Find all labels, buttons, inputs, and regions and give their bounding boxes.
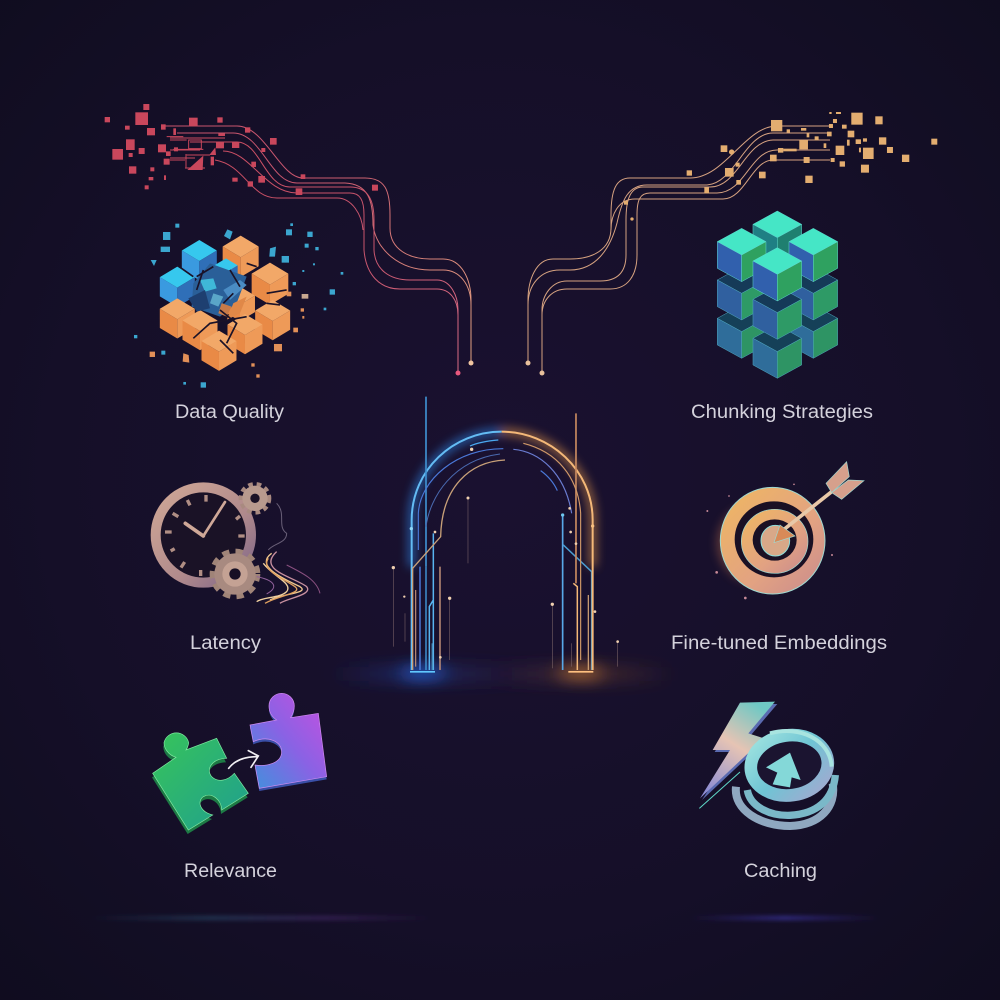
icon: clock with gears	[156, 485, 320, 603]
purple puzzle piece	[250, 693, 327, 791]
middle layer	[717, 267, 838, 339]
green puzzle piece	[152, 733, 248, 834]
lightning bolt	[699, 702, 777, 808]
orange and blue cubes	[160, 236, 290, 371]
left wires	[163, 126, 471, 373]
portal floor glows	[400, 669, 603, 677]
node dots	[392, 448, 619, 659]
floating nodes with stems	[393, 498, 618, 668]
target rings	[720, 487, 825, 594]
stacked coins	[736, 730, 835, 826]
clock ring	[156, 487, 251, 583]
connecting arrow	[229, 751, 258, 768]
right wire end dots	[526, 360, 544, 376]
gold particles	[624, 112, 937, 221]
label: Latency: Latency	[190, 633, 262, 654]
portal floor band	[330, 667, 673, 681]
coin arrow	[766, 753, 801, 787]
left wire end dots	[456, 360, 474, 376]
label: Fine-tuned Embeddings: Fine-tuned Embeddings	[671, 633, 887, 654]
orange arcs	[413, 413, 593, 670]
small gear	[242, 485, 268, 512]
bottom layer	[717, 305, 838, 378]
bottom glow line	[90, 916, 880, 920]
clock ticks	[165, 495, 245, 576]
arch glow	[412, 432, 593, 567]
right data stream: gold particles and wires	[526, 112, 937, 376]
icon: target with arrow	[706, 462, 864, 599]
base glow cores	[410, 671, 593, 673]
label: Relevance: Relevance	[184, 861, 277, 882]
left data stream: red particles and wires	[105, 104, 474, 376]
red particles	[105, 104, 378, 195]
sparks	[706, 483, 833, 599]
label: Chunking Strategies: Chunking Strategies	[691, 402, 873, 423]
icon: puzzle pieces	[152, 693, 327, 834]
orange shards	[150, 292, 308, 378]
blue arcs	[412, 397, 592, 670]
shatter core	[177, 263, 287, 353]
right wires	[528, 126, 830, 373]
target glow	[717, 503, 797, 583]
icon: lightning bolt and coins	[699, 702, 835, 826]
blue shards	[134, 223, 343, 388]
icon: shattered data cubes	[134, 223, 343, 388]
label: Caching: Caching	[744, 861, 817, 882]
central arch portal	[330, 397, 673, 681]
top layer	[717, 211, 838, 301]
label: Data Quality: Data Quality	[175, 402, 285, 423]
clock hands	[185, 502, 225, 536]
large gear	[213, 552, 257, 596]
icon: chunked green and blue cube stack	[717, 211, 838, 378]
arrow	[774, 462, 864, 543]
wavy latency trails	[257, 503, 320, 603]
